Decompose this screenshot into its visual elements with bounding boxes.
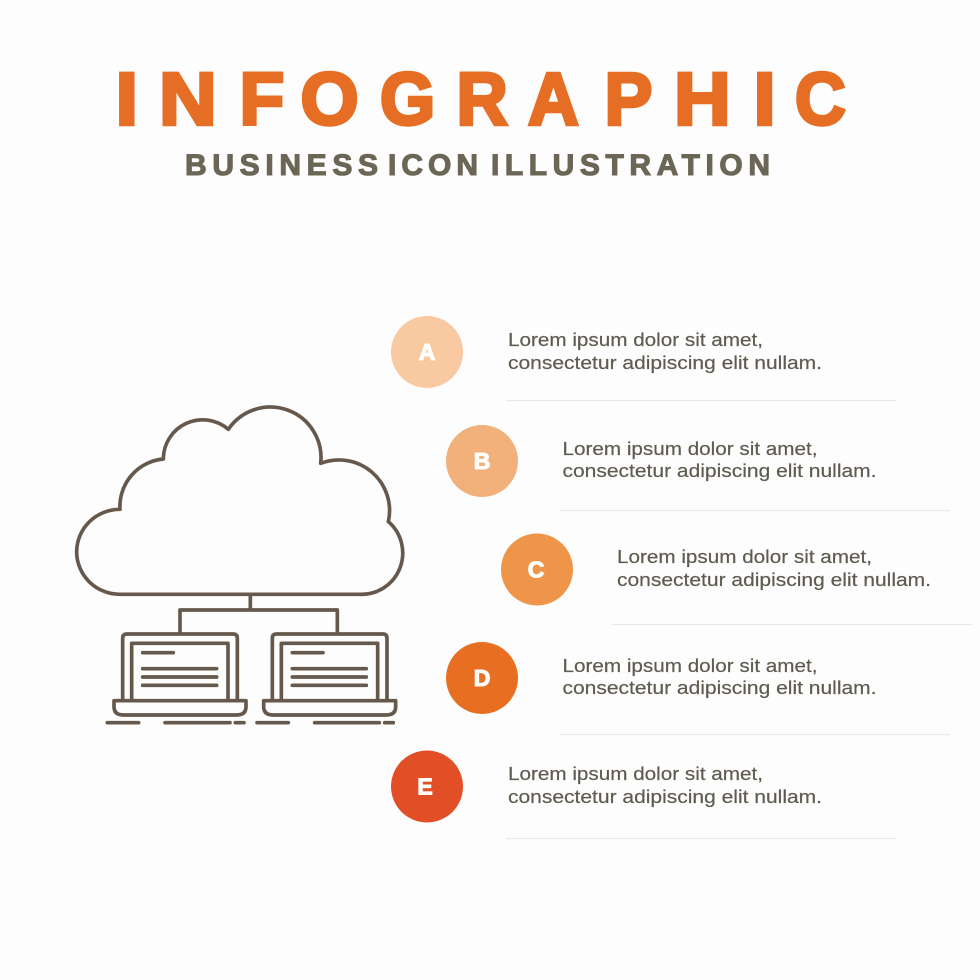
title: R (456, 58, 508, 141)
title: P (604, 59, 652, 141)
title (116, 57, 846, 141)
title: I (754, 58, 776, 141)
subtitle: ILLUSTRATION (491, 149, 770, 182)
left laptop (114, 634, 246, 715)
ground lines (107, 717, 393, 728)
step C: C (528, 556, 544, 582)
subtitle: ICON (388, 149, 478, 182)
icon: cloud network with two laptops (77, 407, 403, 723)
step C: consectetur adipiscing elit nullam. (617, 569, 931, 590)
step B: consectetur adipiscing elit nullam. (562, 460, 876, 481)
title: F (240, 57, 284, 141)
step A: A (419, 339, 435, 365)
step E (391, 750, 896, 838)
step B: Lorem ipsum dolor sit amet, (562, 438, 818, 459)
title: A (528, 59, 579, 141)
step E: consectetur adipiscing elit nullam. (508, 786, 822, 807)
step E: E (417, 774, 433, 800)
step D: consectetur adipiscing elit nullam. (562, 677, 876, 698)
title: I (116, 59, 138, 141)
network connector (180, 594, 337, 633)
subtitle: BUSINESS (185, 149, 378, 182)
title: G (380, 58, 435, 141)
step D: D (474, 665, 490, 691)
step C: Lorem ipsum dolor sit amet, (617, 546, 872, 567)
cloud outline (77, 407, 403, 594)
step B: B (474, 448, 490, 474)
title: C (795, 59, 846, 141)
step A: consectetur adipiscing elit nullam. (508, 352, 822, 373)
step B (446, 425, 950, 510)
step A (391, 316, 896, 400)
subtitle (185, 149, 770, 182)
right laptop (264, 634, 396, 715)
step D: Lorem ipsum dolor sit amet, (562, 655, 818, 676)
step E: Lorem ipsum dolor sit amet, (508, 763, 763, 784)
step A: Lorem ipsum dolor sit amet, (508, 329, 763, 350)
step D (446, 642, 950, 734)
title: O (300, 58, 359, 140)
title: H (674, 59, 731, 141)
step C (501, 534, 972, 624)
title: N (159, 58, 217, 141)
